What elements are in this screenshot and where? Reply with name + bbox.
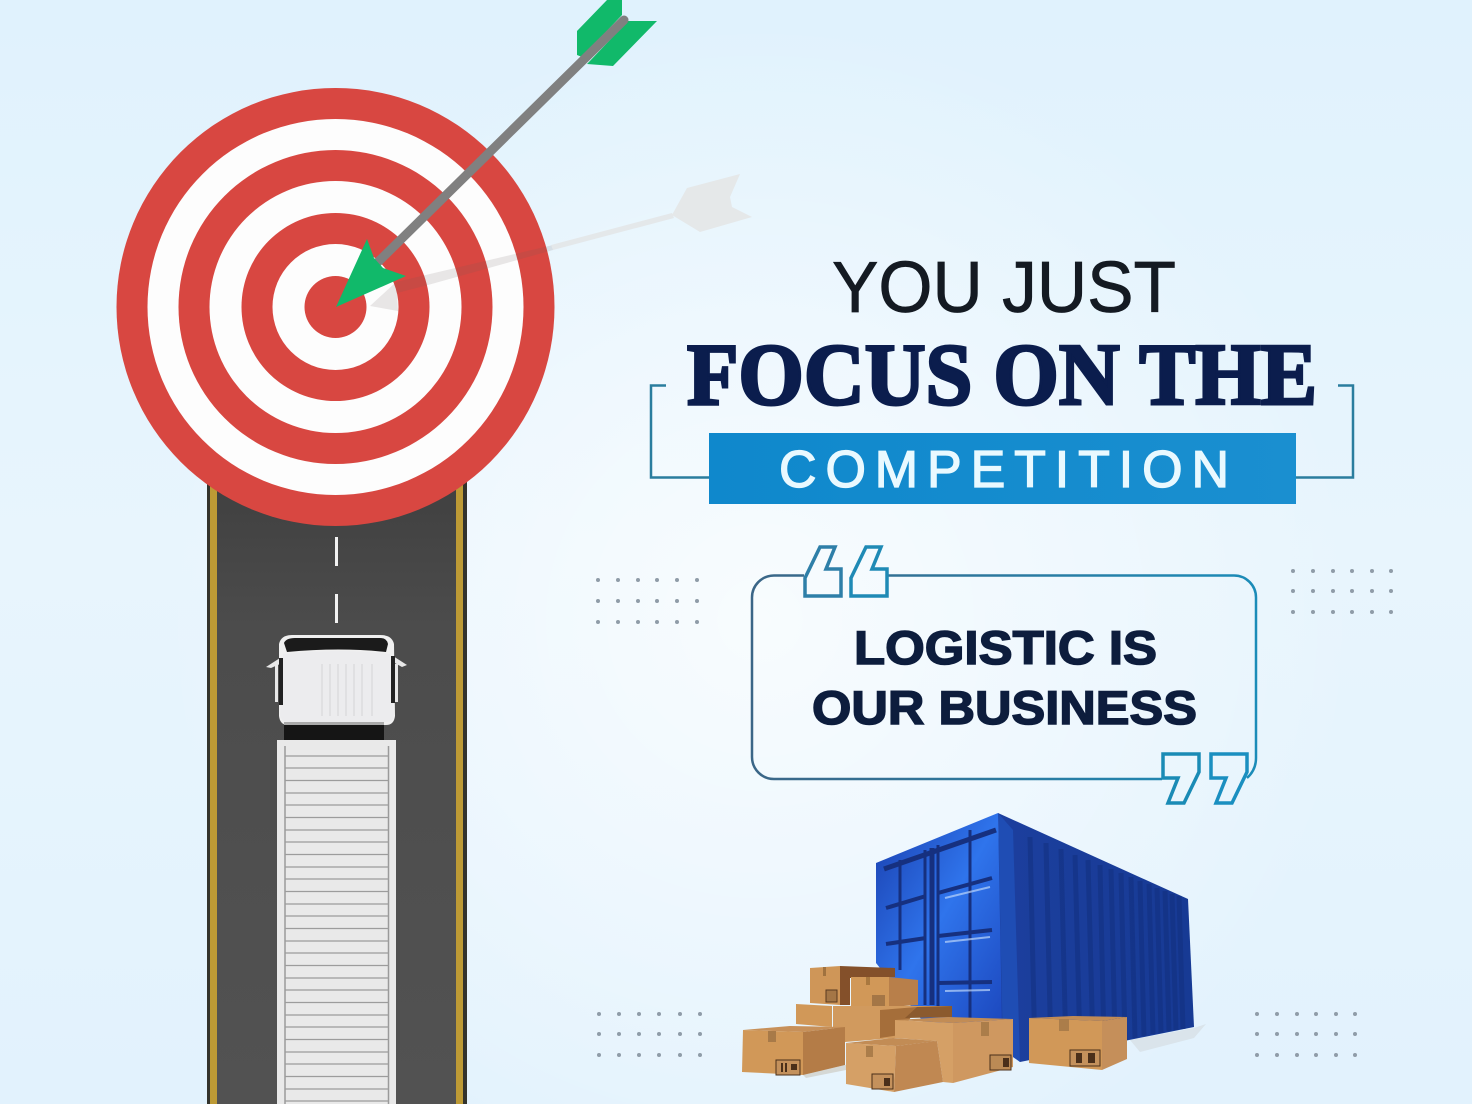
quote box (752, 547, 1256, 803)
box front left (742, 1026, 845, 1075)
container side (998, 813, 1194, 1062)
truck trailer (277, 740, 396, 1104)
container and boxes (742, 813, 1206, 1092)
box front bottom (846, 1038, 943, 1092)
target (116, 88, 554, 526)
box right (1029, 1016, 1127, 1070)
road (207, 470, 467, 1104)
heading line: you just: YOU JUST (832, 248, 1176, 328)
truck mirrors (266, 656, 407, 705)
box back stacked (851, 977, 918, 1007)
ghost arrow shadow (370, 174, 752, 311)
competition banner (709, 433, 1296, 504)
heading (687, 248, 1317, 424)
arrow fletching (577, 0, 657, 66)
box middle left (796, 1004, 832, 1027)
box back top (810, 966, 895, 1005)
quote text (812, 621, 1197, 734)
quote frame (752, 576, 1256, 779)
bracket around heading (651, 386, 1353, 478)
closing quote marks (1163, 754, 1247, 803)
truck cab (279, 635, 395, 725)
truck (266, 635, 407, 1104)
arrow shaft (378, 20, 624, 262)
dots top right (1291, 569, 1393, 614)
green arrow (336, 0, 657, 307)
arrow head (336, 239, 406, 307)
box shadows (803, 1064, 858, 1078)
quote text: LOGISTIC IS (854, 621, 1157, 674)
heading line: focus on the: FOCUS ON THE (687, 327, 1317, 424)
box middle wide (833, 1006, 952, 1042)
quote text: OUR BUSINESS (812, 681, 1197, 734)
dots top left (596, 578, 699, 624)
container front doors (876, 813, 1002, 1030)
dots bottom left (597, 1012, 702, 1057)
opening quote marks (805, 547, 887, 596)
ground shadow (1130, 1024, 1206, 1052)
box tall centre (895, 1017, 1013, 1083)
competition banner: COMPETITION (779, 441, 1229, 499)
truck gap between cab and trailer (284, 722, 384, 742)
dots bottom right (1255, 1012, 1357, 1057)
